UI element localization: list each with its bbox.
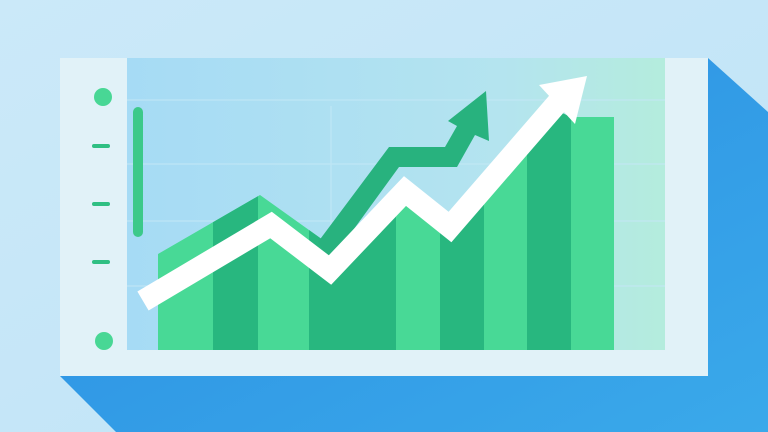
blue shadow xyxy=(60,58,768,432)
dark green arrow xyxy=(318,91,489,262)
chart area xyxy=(127,58,665,350)
bar chart xyxy=(150,100,620,350)
white arrow xyxy=(143,76,587,301)
sidebar markers xyxy=(92,88,143,350)
panel frame xyxy=(60,58,708,376)
